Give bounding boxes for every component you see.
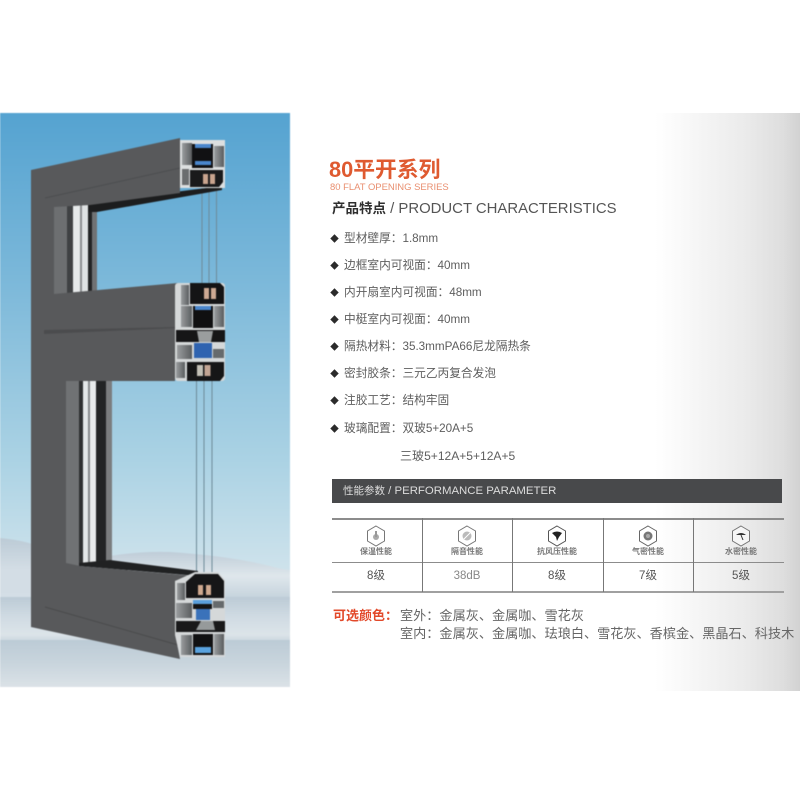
- subtitle: 80 FLAT OPENING SERIES: [330, 182, 449, 193]
- feature: seal strip: 密封胶条：三元乙丙复合发泡: [344, 367, 496, 380]
- upper window jamb: [54, 186, 222, 295]
- value: sound: 38dB: [454, 570, 480, 582]
- value: insulation: 8级: [367, 570, 385, 582]
- feature: glass double: 玻璃配置：双玻5+20A+5: [344, 422, 473, 435]
- icon: water tightness: [732, 526, 750, 546]
- middle section cut: [175, 283, 225, 381]
- feature: insulation material: 隔热材料：35.3mmPA66尼龙隔热条: [344, 340, 531, 353]
- label: water tightness: 水密性能: [725, 547, 757, 556]
- value: wind pressure: 8级: [548, 570, 566, 582]
- performance table: [332, 518, 784, 593]
- feature: mullion sight line: 中梃室内可视面：40mm: [344, 313, 470, 326]
- panel: window product photo: [0, 112, 291, 688]
- label: insulation: 保温性能: [360, 547, 392, 556]
- value: water tightness: 5级: [732, 570, 750, 582]
- heading bar: performance parameter: 性能参数 / PERFORMANCE PARAMETER: [343, 485, 556, 497]
- sky: [0, 113, 290, 687]
- snow hills: [0, 538, 290, 687]
- feature: glue injection: 注胶工艺：结构牢固: [344, 394, 449, 407]
- bottom section cut: [175, 572, 225, 657]
- feature: frame sight line: 边框室内可视面：40mm: [344, 259, 470, 272]
- icon: wind pressure: [548, 525, 566, 547]
- label: air tightness: 气密性能: [632, 547, 664, 556]
- background grey gradient band: [655, 113, 800, 691]
- top section cut: [180, 140, 225, 188]
- icon: insulation: [367, 526, 385, 546]
- colours: interior: 室内：金属灰、金属咖、珐琅白、雪花灰、香槟金、黑晶石、科技木: [400, 626, 794, 641]
- label: sound: 隔音性能: [451, 547, 483, 556]
- colours: exterior: 室外：金属灰、金属咖、雪花灰: [400, 608, 584, 623]
- value: air tightness: 7级: [639, 570, 657, 582]
- heading: product characteristics: 产品特点 / PRODUCT CHARACTERISTICS: [332, 201, 617, 217]
- heading bar: performance parameter: [332, 479, 782, 503]
- feature: sash sight line: 内开扇室内可视面：48mm: [344, 286, 482, 299]
- label: optional colours: 可选颜色：: [333, 608, 398, 623]
- icon: sound: [458, 526, 476, 546]
- label: wind pressure: 抗风压性能: [537, 547, 577, 556]
- feature: glass triple: 三玻5+12A+5+12A+5: [400, 449, 515, 463]
- glass panes: [196, 186, 216, 575]
- lower window jamb: [66, 378, 198, 576]
- title: 80平开系列: [329, 157, 440, 182]
- aluminium frame face: [31, 138, 195, 659]
- feature: wall thickness: 型材壁厚：1.8mm: [344, 232, 438, 245]
- icon: air tightness: [639, 526, 657, 546]
